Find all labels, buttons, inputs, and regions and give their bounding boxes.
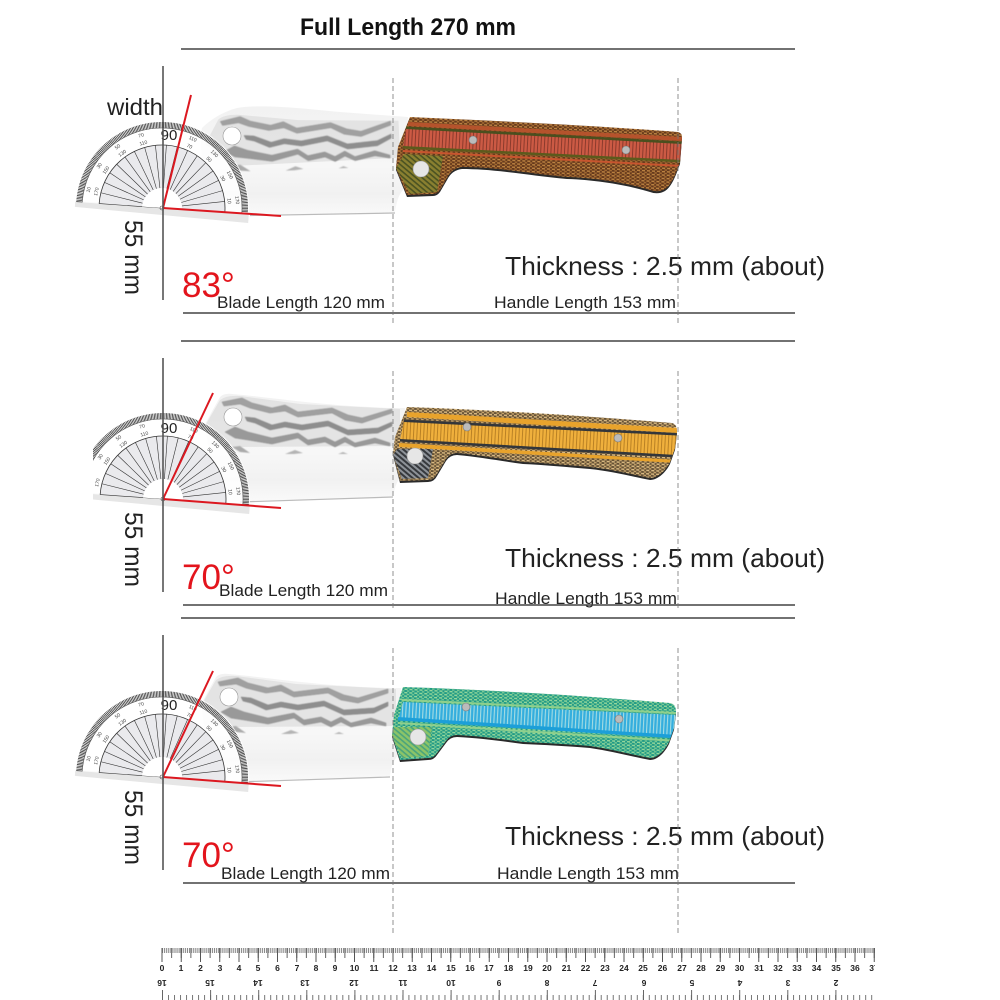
- inch numbers: 15: [205, 978, 215, 988]
- inch numbers: [158, 980, 838, 986]
- blade 1: [201, 106, 408, 216]
- panel: knife 3 teal handle: [75, 635, 825, 935]
- inch numbers: 6: [641, 978, 646, 988]
- blade length 2: Blade Length 120 mm: [219, 581, 388, 600]
- centimetre numbers: 20: [542, 963, 552, 973]
- width axis 2: [162, 358, 164, 592]
- centimetre numbers: 36: [850, 963, 860, 973]
- width axis 3: [162, 635, 164, 870]
- inch numbers: 10: [446, 978, 456, 988]
- centimetre numbers: 12: [388, 963, 398, 973]
- panel: knife 2 amber handle: [76, 358, 825, 610]
- angle lines 2: [163, 393, 281, 508]
- width value 3: 55 mm: [119, 790, 147, 865]
- centimetre numbers: 17: [484, 963, 494, 973]
- centimetre numbers: 29: [716, 963, 725, 973]
- centimetre numbers: 5: [256, 963, 261, 973]
- centimetre numbers: 37: [869, 963, 879, 973]
- angle lines 3: [163, 671, 281, 786]
- centimetre numbers: 3: [218, 963, 223, 973]
- centimetre numbers: 35: [831, 963, 841, 973]
- centimetre numbers: 22: [581, 963, 590, 973]
- handle 1: [396, 117, 682, 197]
- handle 2: [393, 407, 677, 483]
- protractor 2: [93, 413, 250, 514]
- protractor label 3: 90: [161, 697, 177, 714]
- handle 3: [392, 687, 676, 762]
- centimetre numbers: 28: [696, 963, 706, 973]
- dimension line 1: [183, 312, 795, 314]
- angle value 3: 70°: [182, 836, 235, 875]
- blade 3: [201, 674, 401, 782]
- centimetre numbers: 33: [792, 963, 802, 973]
- centimetre numbers: 15: [446, 963, 456, 973]
- centimetre numbers: 10: [350, 963, 359, 973]
- centimetre numbers: 7: [295, 963, 300, 973]
- dashed guides 3: [393, 648, 678, 935]
- blade 2: [205, 394, 405, 502]
- centimetre numbers: 16: [465, 963, 475, 973]
- dashed guides 1: [393, 78, 678, 323]
- centimetre numbers: 1: [179, 963, 184, 973]
- inch numbers: 16: [157, 978, 167, 988]
- width value 1: 55 mm: [119, 220, 147, 295]
- inch numbers: 4: [737, 978, 742, 988]
- handle length 3: Handle Length 153 mm: [497, 864, 679, 883]
- angle value 1: 83°: [182, 266, 235, 305]
- inch numbers: 13: [300, 978, 310, 988]
- centimetre numbers: 30: [735, 963, 744, 973]
- thickness 3: Thickness : 2.5 mm (about): [505, 821, 825, 851]
- inch numbers: 12: [349, 978, 359, 988]
- blade length 3: Blade Length 120 mm: [221, 864, 390, 883]
- full length line: [181, 48, 795, 50]
- inch numbers: 5: [689, 978, 694, 988]
- handle length 2: Handle Length 153 mm: [495, 589, 677, 608]
- protractor label 1: 90: [161, 127, 177, 144]
- inch numbers: 14: [253, 978, 263, 988]
- inch numbers: 3: [785, 978, 790, 988]
- angle lines 1: [163, 95, 281, 216]
- inch numbers: 7: [592, 978, 597, 988]
- thickness 1: Thickness : 2.5 mm (about): [505, 251, 825, 281]
- centimetre numbers: 0: [160, 963, 165, 973]
- inch numbers: 9: [496, 978, 501, 988]
- metric ticks: [162, 950, 875, 955]
- centimetre numbers: 9: [333, 963, 338, 973]
- centimetre numbers: 18: [504, 963, 513, 973]
- centimetre numbers: 14: [427, 963, 436, 973]
- centimetre numbers: 11: [370, 963, 379, 973]
- centimetre numbers: [160, 965, 875, 971]
- protractor 3: [75, 684, 255, 792]
- centimetre numbers: 8: [314, 963, 319, 973]
- width value 2: 55 mm: [119, 512, 147, 587]
- handle length 1: Handle Length 153 mm: [494, 293, 676, 312]
- centimetre numbers: 19: [523, 963, 533, 973]
- inch ticks: [162, 995, 875, 998]
- dimension line 3: [183, 882, 795, 884]
- centimetre numbers: 27: [677, 963, 687, 973]
- centimetre numbers: 6: [275, 963, 280, 973]
- dashed guides 2: [393, 371, 678, 610]
- centimetre numbers: 25: [638, 963, 648, 973]
- centimetre numbers: 34: [812, 963, 821, 973]
- inch numbers: 11: [398, 978, 408, 988]
- angle value 2: 70°: [182, 558, 235, 597]
- centimetre numbers: 2: [198, 963, 203, 973]
- width axis 1: [162, 66, 164, 300]
- centimetre numbers: 4: [237, 963, 242, 973]
- protractor label 2: 90: [161, 420, 177, 437]
- centimetre numbers: 26: [658, 963, 667, 973]
- inch numbers: 8: [544, 978, 549, 988]
- title: Full Length 270 mm: [300, 14, 516, 41]
- panel: knife 1 red handle: [75, 66, 825, 323]
- centimetre numbers: 13: [407, 963, 417, 973]
- centimetre numbers: 31: [754, 963, 764, 973]
- centimetre numbers: 21: [562, 963, 571, 973]
- thickness 2: Thickness : 2.5 mm (about): [505, 543, 825, 573]
- ruler: [157, 950, 879, 998]
- protractor 1: [75, 115, 255, 223]
- centimetre numbers: 32: [773, 963, 783, 973]
- blade length 1: Blade Length 120 mm: [217, 293, 385, 312]
- centimetre numbers: 23: [600, 963, 610, 973]
- width label: width: [106, 94, 163, 120]
- dimension line 2: [183, 604, 795, 606]
- inch numbers: 2: [833, 978, 838, 988]
- centimetre numbers: 24: [619, 963, 629, 973]
